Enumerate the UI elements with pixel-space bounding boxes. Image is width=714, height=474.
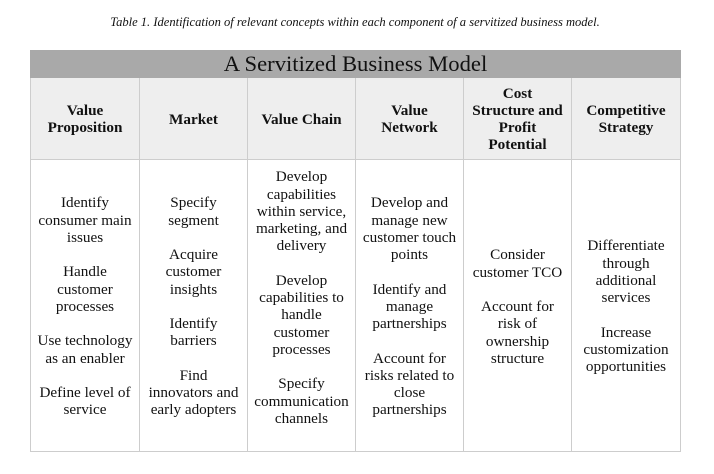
column text: Value Network: Develop and [371,194,448,211]
column text: Value Proposition: Define level of [39,384,131,401]
column text: Cost Structure and Profit Potential: risk of [498,315,537,332]
column text: Value Chain: capabilities to [259,289,344,306]
title bar [30,50,681,78]
column text: Market: insights [170,281,217,298]
column text: Value Proposition: issues [67,229,103,246]
column text: Value Network: risks related to [365,367,454,384]
column text: Value Chain: Develop [276,272,327,289]
column text: Value Chain: communication [254,393,349,410]
header: Value Chain: Value Chain [261,110,342,128]
column text: Value Chain: marketing, and [256,220,347,237]
column text: Competitive Strategy: services [602,289,650,306]
header: Market: Market [169,110,218,128]
column text: Value Network: partnerships [372,401,447,418]
column text: Market [148,194,238,418]
column text: Cost Structure and Profit Potential: customer TCO [473,264,562,281]
header: Competitive Strategy: Competitive [586,102,666,118]
column text: Competitive Strategy [583,237,669,375]
column text: Market: early adopters [151,401,236,418]
column text: Value Proposition: consumer main [38,212,132,229]
column text: Value Chain: customer [274,324,329,341]
column text: Value Proposition: customer [57,281,113,298]
column text: Market: Specify [170,194,217,211]
column text: Value Network: close [394,384,425,401]
column text: Market: innovators and [149,384,238,401]
column text: Market: customer [166,263,221,280]
column text: Competitive Strategy: opportunities [586,358,666,375]
header: Cost Structure and Profit Potential: Cost [503,84,532,102]
column text: Cost Structure and Profit Potential: ownership [486,333,549,350]
header: Value Proposition [48,102,122,136]
column text: Competitive Strategy: additional [596,272,656,289]
column text: Cost Structure and Profit Potential: Consider [490,246,545,263]
column text: Cost Structure and Profit Potential: structure [491,350,544,367]
column text: Value Proposition: Handle [63,263,107,280]
column text: Value Chain: capabilities [267,186,336,203]
column text: Value Network: manage new [371,212,448,229]
column text: Market: barriers [170,332,217,349]
column text: Value Proposition: Use technology [38,332,132,349]
column text: Value Chain [254,168,349,427]
column text: Value Network [363,194,456,418]
header: Value Proposition: Proposition [48,119,122,136]
column text: Value Proposition: as an enabler [45,350,125,367]
header: Value Network [381,102,438,136]
column text: Value Chain: handle [281,306,322,323]
header row background [30,78,681,159]
column text: Value Chain: processes [272,341,331,358]
header: Cost Structure and Profit Potential: Profit [499,119,536,136]
column text: Competitive Strategy: through [602,255,650,272]
column text: Value Chain: Develop [276,168,327,185]
column text: Value Proposition: Identify [61,194,109,211]
column text: Value Network: Identify and [373,281,446,298]
column text: Value Chain: channels [275,410,328,427]
header: Value Network: Network [381,119,438,136]
header: Cost Structure and Profit Potential [472,84,563,153]
header: Competitive Strategy: Strategy [599,119,653,136]
column text: Competitive Strategy: customization [583,341,669,358]
column text: Value Network: Account for [373,350,446,367]
header: Competitive Strategy [586,102,666,136]
header: Value Proposition: Value [67,102,103,118]
header: Cost Structure and Profit Potential: Potential [488,136,547,153]
column text: Value Chain: within service, [257,203,346,220]
column text: Value Network: manage [386,298,433,315]
column text: Value Network: customer touch [363,229,456,246]
header: Cost Structure and Profit Potential: Structure and [472,102,563,119]
column text: Value Proposition: service [63,401,106,418]
column text: Value Chain: Specify [278,375,325,392]
title bar: A Servitized Business Model [224,51,487,76]
column text: Competitive Strategy: Differentiate [587,237,665,254]
column text: Market: segment [168,212,219,229]
column text: Value Proposition [38,194,132,418]
header: Value Network: Value [391,102,428,118]
column text: Market: Find [180,367,207,384]
column text: Cost Structure and Profit Potential: Account for [481,298,554,315]
column text: Value Proposition: processes [56,298,114,315]
column text: Market: Identify [169,315,218,332]
column text: Cost Structure and Profit Potential [473,246,562,367]
column text: Competitive Strategy: Increase [601,324,651,341]
column text: Value Network: partnerships [372,315,447,332]
column text: Market: Acquire [169,246,218,263]
table: servitized business model [30,50,681,452]
column text: Value Network: points [391,246,428,263]
caption: Table 1. Identification of relevant concepts within each component of a servitized business model. [110,15,600,29]
column text: Value Chain: delivery [277,237,326,254]
